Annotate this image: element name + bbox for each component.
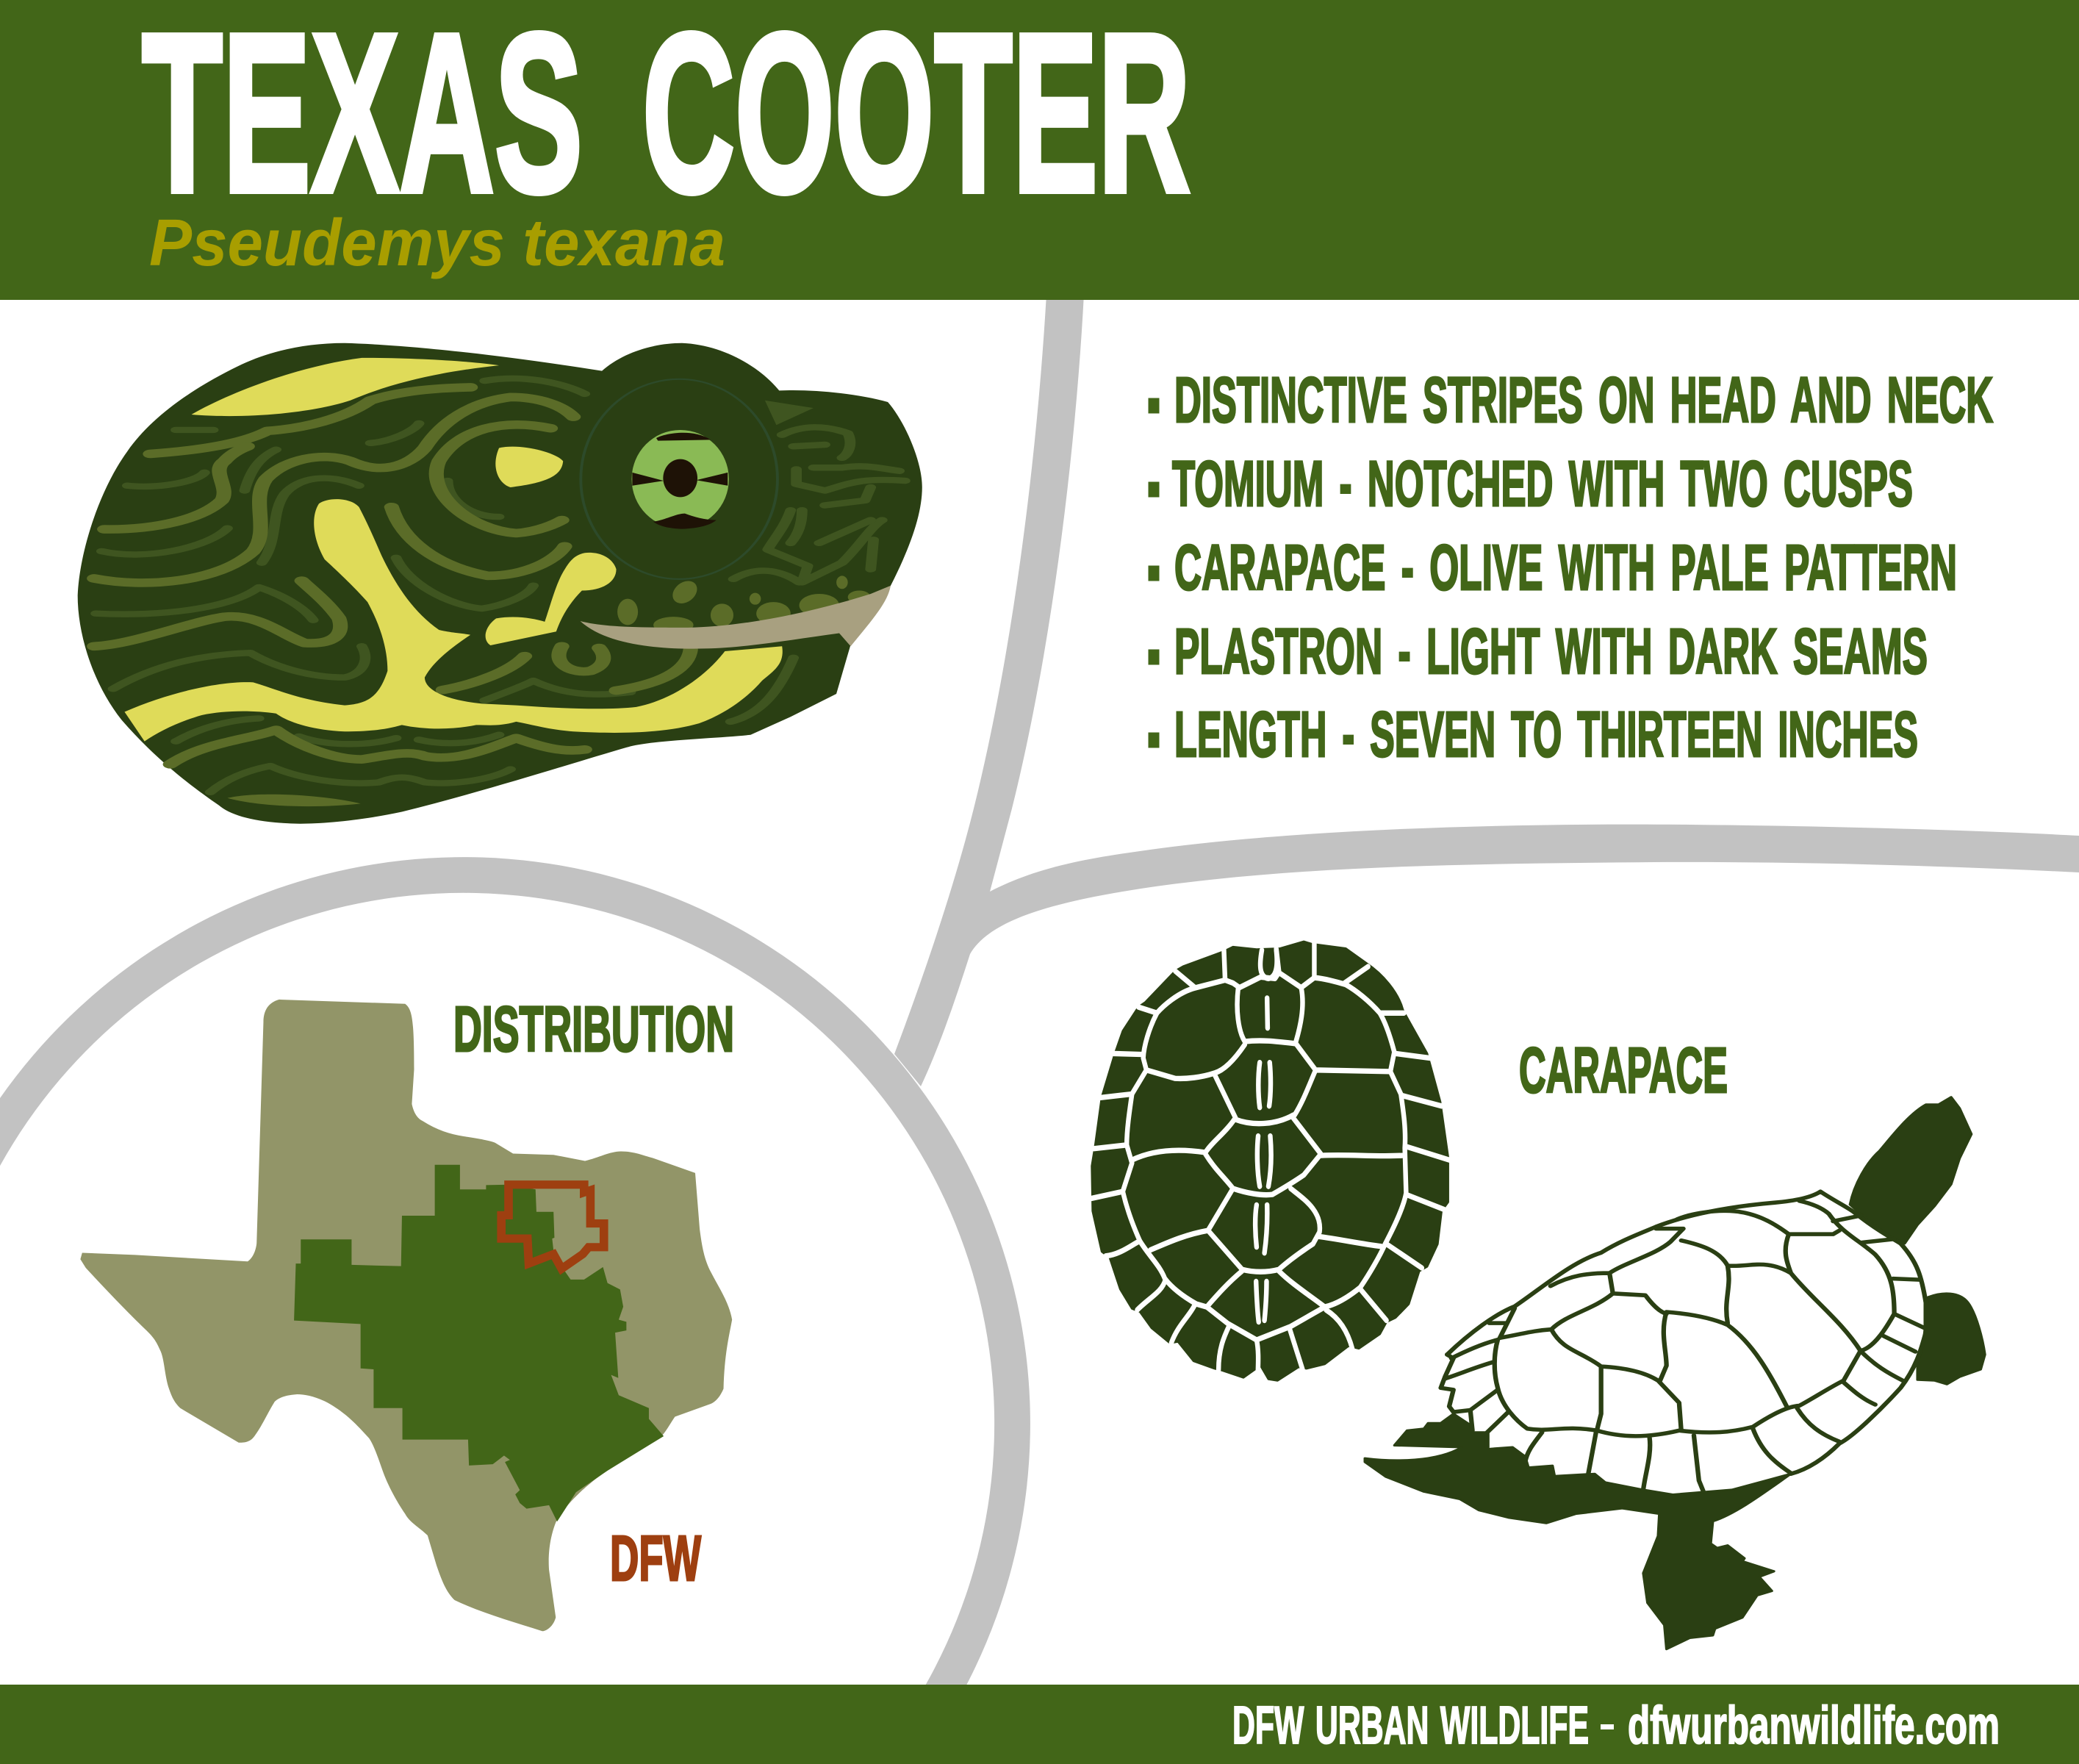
facts list [1149,365,1993,770]
label: carapace: CARAPACE [1519,1035,1728,1106]
label: DFW: DFW [610,1523,702,1594]
footer credit: DFW URBAN WILDLIFE [1232,1696,1589,1755]
head yellow markings [124,358,783,742]
scientific name: Pseudemys texana [149,207,725,280]
distribution map of Texas [80,1000,732,1631]
head beak [581,586,891,649]
carapace scute seams [1091,942,1449,1374]
turtle shell lines [1441,1191,1926,1491]
header band [0,0,2079,300]
DFW outline [501,1185,604,1269]
head stripes: dark [96,379,905,792]
head eye [581,379,778,579]
illustration: turtle head [78,343,922,824]
turtle flippers and underside [1365,1097,1985,1649]
illustration: turtle side view [1365,1097,1985,1649]
label: distribution: DISTRIBUTION [453,994,734,1065]
head stripes: olive [94,387,691,764]
footer band [0,1685,2079,1764]
illustration: carapace top view [1091,942,1449,1380]
panel dividers: grey curved lines [0,294,2079,1690]
species range [294,1165,664,1521]
